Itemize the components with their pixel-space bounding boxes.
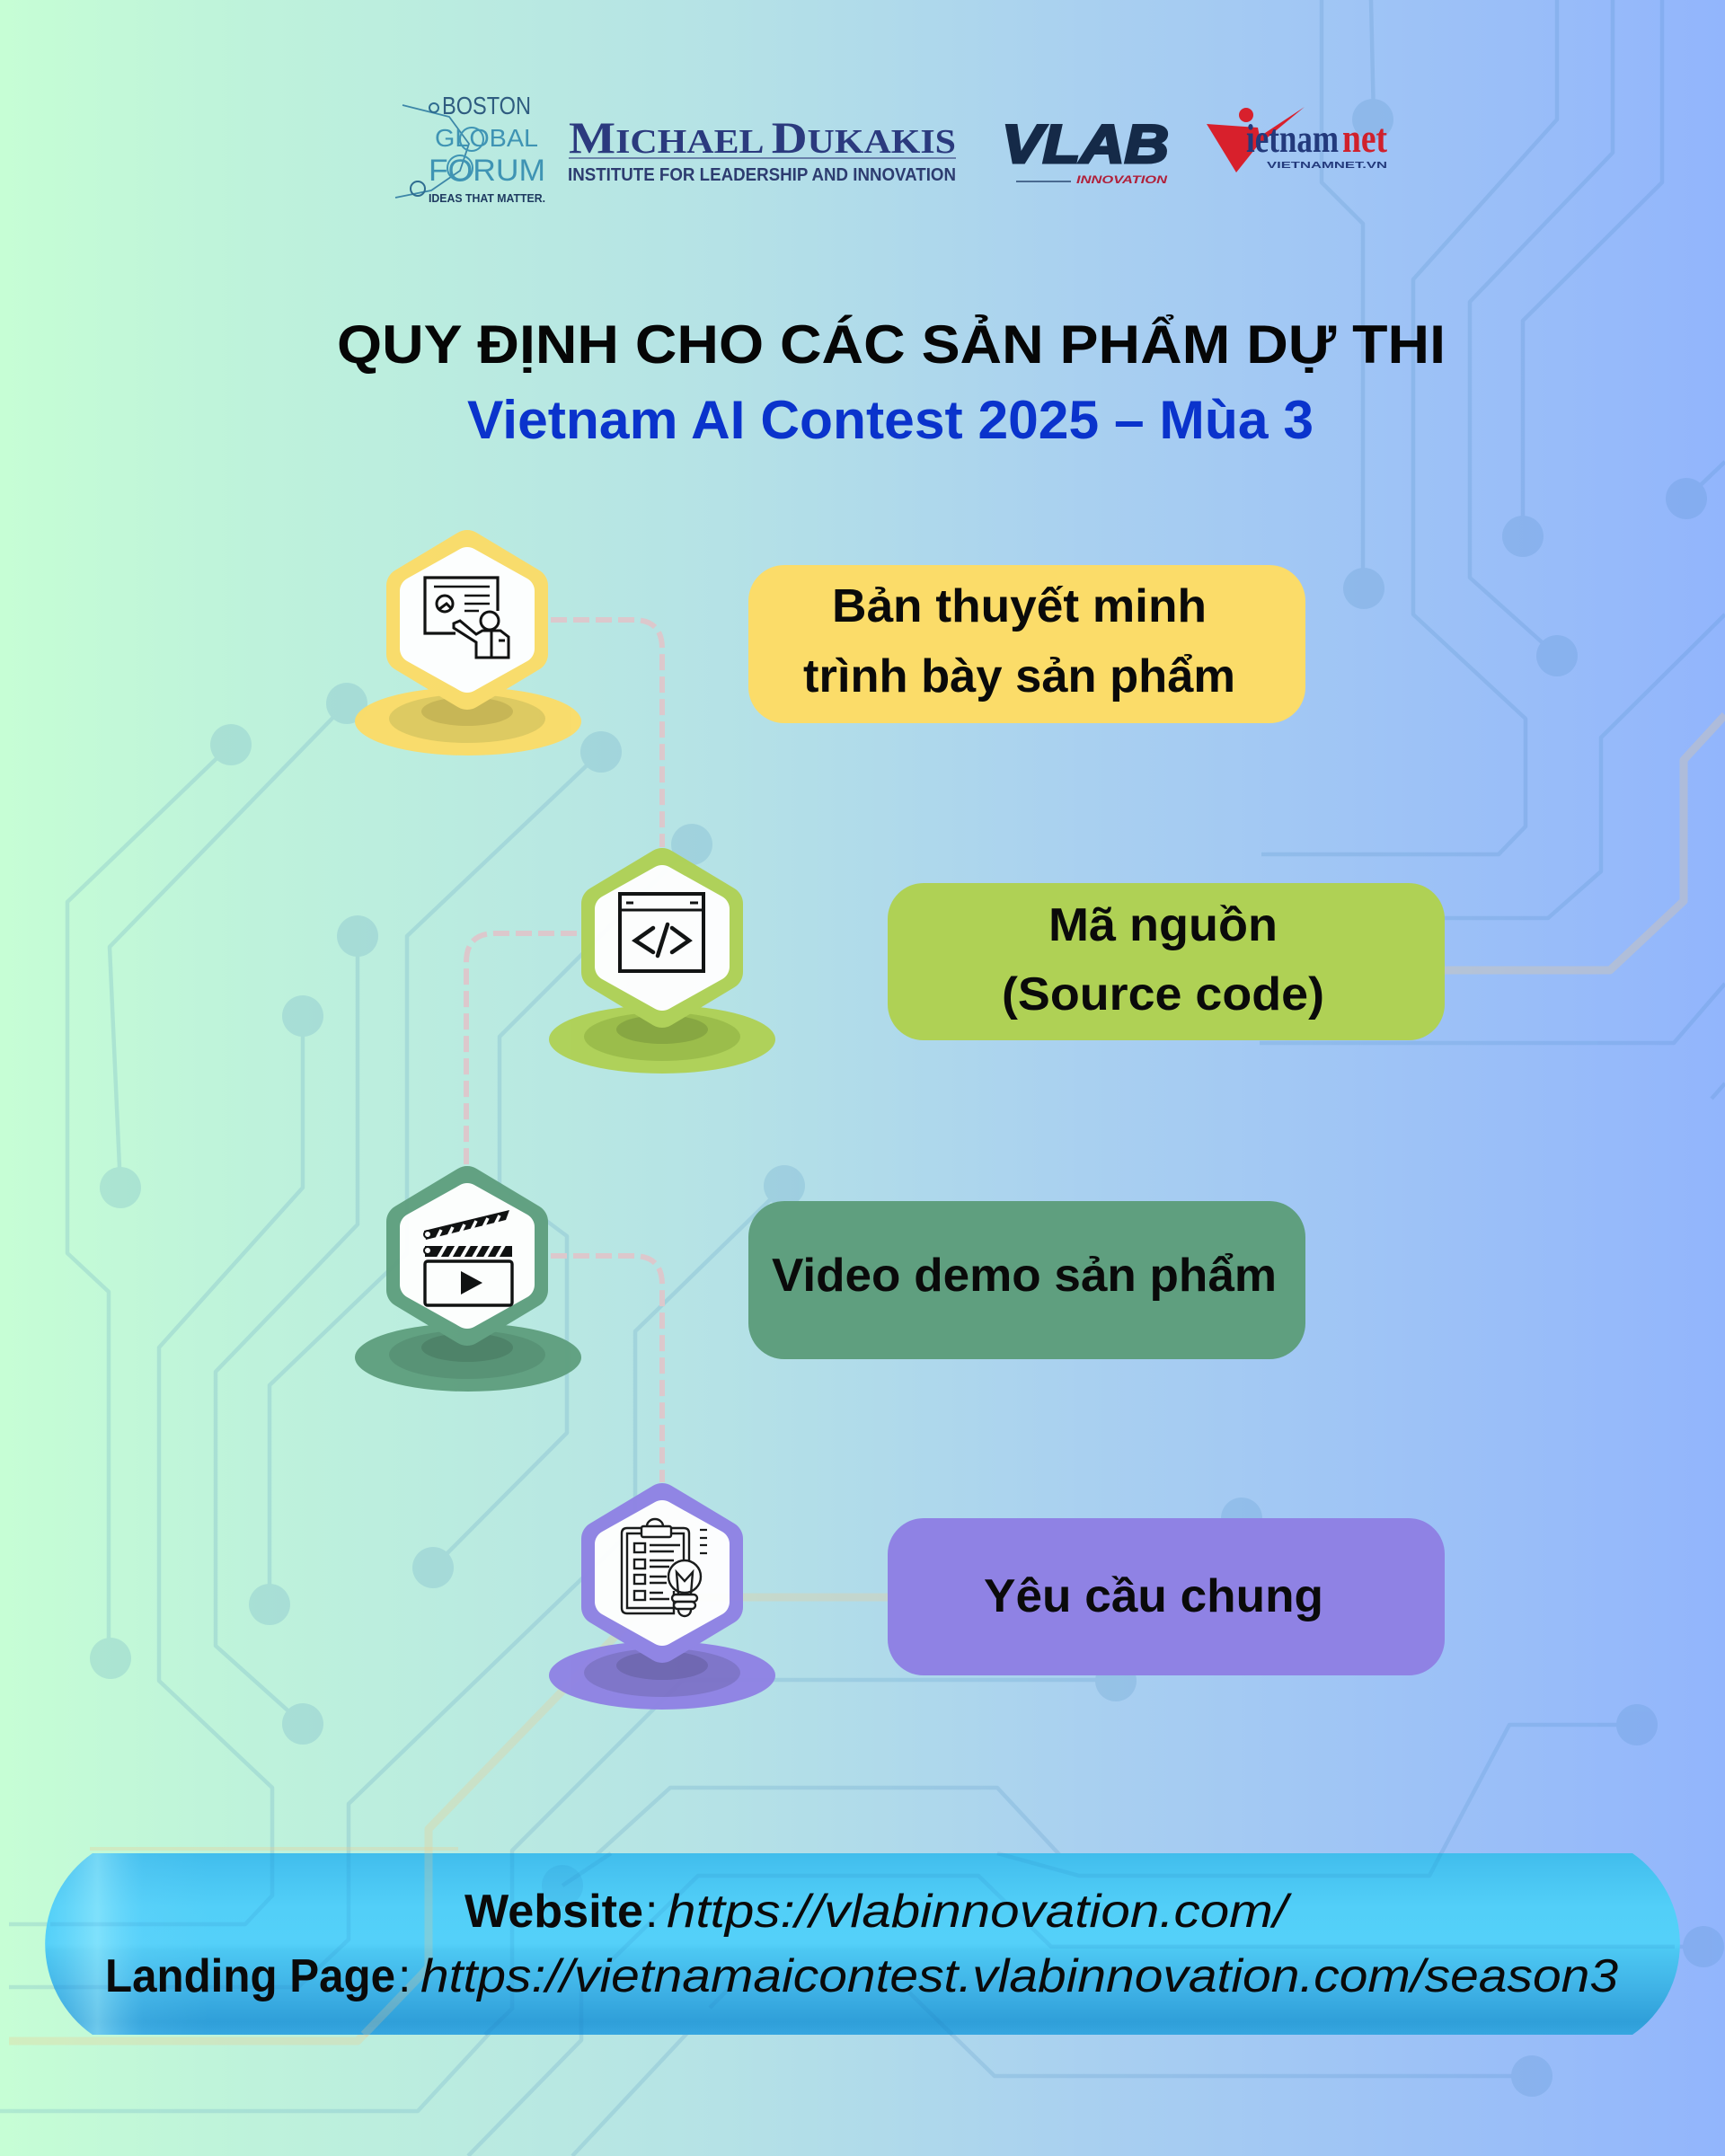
step 1: presentation	[355, 548, 581, 755]
step 2: source code	[549, 866, 775, 1074]
pedestal	[549, 1641, 775, 1710]
pedestal	[549, 1005, 775, 1074]
logo: Vietnamnet: VIETNAMNET.VN	[1267, 161, 1387, 171]
label box: Bản thuyết minh: Bản thuyết minh	[832, 580, 1207, 632]
logo: VLAB Innovation: VLAB	[1002, 114, 1169, 174]
website line: :	[645, 1886, 658, 1938]
link banner	[45, 1853, 1680, 2035]
pill background	[45, 1853, 1680, 2035]
step 3: video demo	[355, 1184, 581, 1392]
pedestal	[355, 687, 581, 755]
icon: presenter at board	[425, 578, 509, 658]
logo row	[395, 92, 1388, 205]
website line	[464, 1886, 1292, 1938]
label box: Video demo sản phẩm	[748, 1201, 1305, 1359]
logo: Boston Global Forum	[395, 92, 545, 205]
hexagon badge	[599, 1501, 725, 1645]
subtitle: Vietnam AI Contest 2025 – Mùa 3	[467, 390, 1314, 450]
dashed connector: step 1 to step 2	[551, 620, 662, 847]
logo: Vietnamnet: net	[1342, 115, 1388, 161]
step 4: general requirements	[549, 1501, 775, 1710]
hexagon badge	[404, 548, 530, 692]
icon: clapperboard	[424, 1210, 512, 1305]
landing page line: https://vietnamaicontest.vlabinnovation.com/season3	[420, 1950, 1618, 2002]
pedestal	[355, 1323, 581, 1392]
logo: Boston Global Forum: IDEAS THAT MATTER.	[429, 191, 545, 205]
orange circuit traces	[9, 715, 1725, 2041]
logo: Vietnamnet: ietnam	[1246, 117, 1339, 161]
hexagon badge	[404, 1184, 530, 1328]
icon: code window	[620, 894, 703, 971]
label box: Bản thuyết minh: trình bày sản phẩm	[803, 650, 1235, 702]
title: QUY ĐỊNH CHO CÁC SẢN PHẨM DỰ THI	[337, 314, 1446, 375]
website line: https://vlabinnovation.com/	[667, 1886, 1292, 1938]
label box: Yêu cầu chung: Yêu cầu chung	[984, 1570, 1323, 1622]
logo: VLAB Innovation: INNOVATION	[1076, 173, 1167, 186]
hexagon badge	[599, 866, 725, 1010]
landing page line: Landing Page	[105, 1950, 395, 2002]
logo: Boston Global Forum: GLOBAL	[435, 124, 538, 152]
icon: checklist and light bulb	[622, 1519, 707, 1616]
dashed connector: step 2 to step 3	[466, 933, 577, 1166]
label box: Video demo sản phẩm: Video demo sản phẩm	[772, 1250, 1277, 1302]
website line: Website	[464, 1886, 643, 1938]
label box: Bản thuyết minh	[748, 565, 1305, 723]
label box: Yêu cầu chung	[888, 1518, 1445, 1675]
logo: Michael Dukakis Institute: INSTITUTE FOR LEADERSHIP AND INNOVATION	[568, 165, 956, 185]
label box: Mã nguồn	[888, 883, 1445, 1040]
label box: Mã nguồn: Mã nguồn	[1048, 899, 1278, 951]
logo: Boston Global Forum: BOSTON	[442, 92, 531, 119]
landing page line: :	[398, 1950, 411, 2002]
logo: Michael Dukakis Institute: MICHAEL DUKAKIS	[569, 112, 956, 163]
dashed connector: step 3 to step 4	[551, 1256, 662, 1482]
logo: Michael Dukakis Institute	[568, 112, 956, 185]
label box: Mã nguồn: (Source code)	[1002, 968, 1324, 1021]
logo: Boston Global Forum: FORUM	[429, 154, 545, 188]
logo: Vietnamnet	[1207, 107, 1388, 172]
